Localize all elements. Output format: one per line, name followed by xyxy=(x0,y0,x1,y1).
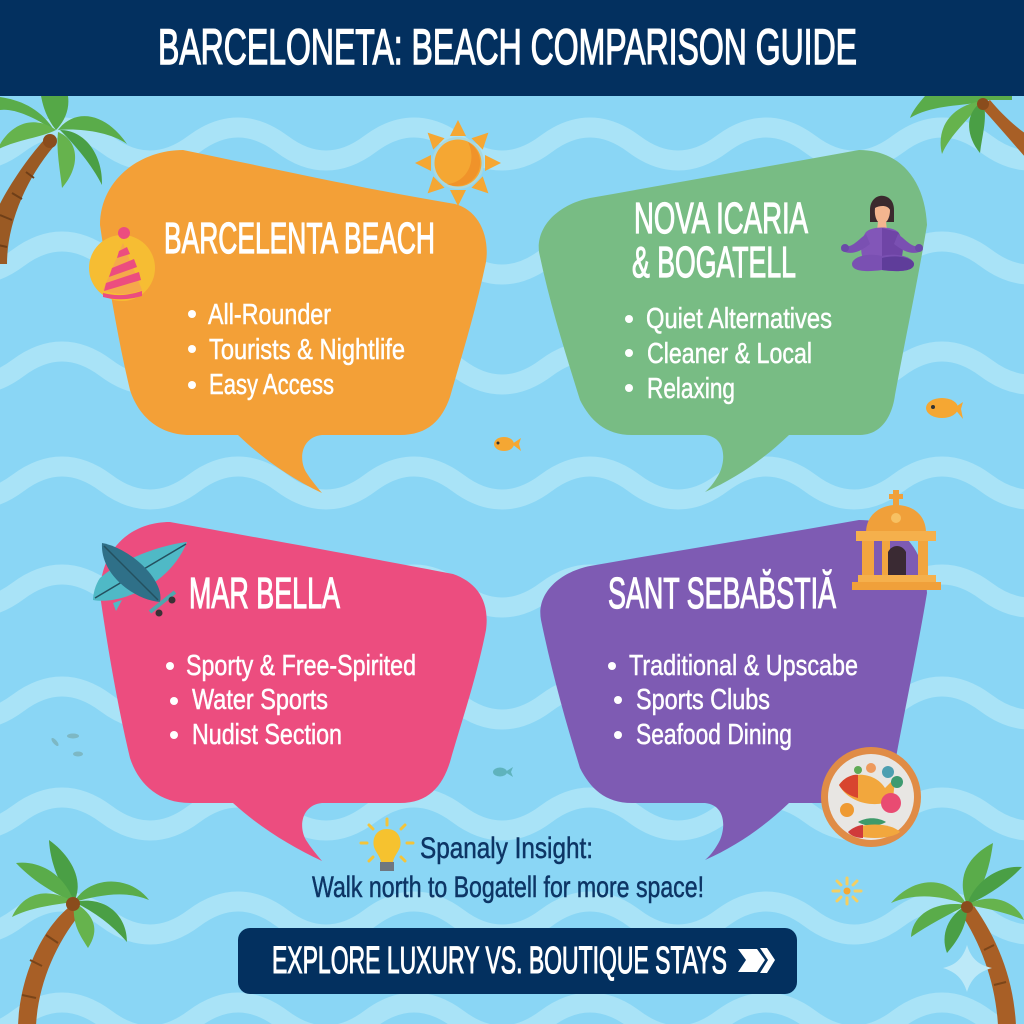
call to action button: EXPLORE LUXURY VS. BOUTIQUE STAYS xyxy=(272,940,727,982)
icon: palm tree bottom left xyxy=(12,840,149,1024)
icon: surfboards and skateboard xyxy=(93,542,187,616)
icon: palm tree top right xyxy=(910,96,1024,158)
panel: Mar Bella xyxy=(93,522,487,861)
icon: palm tree bottom right xyxy=(891,843,1024,1024)
icon: small sun sparkle xyxy=(833,878,861,904)
bullet list: Cleaner & Local xyxy=(647,338,812,370)
bullet list: Seafood Dining xyxy=(636,719,792,751)
bullet list: Traditional & Upscabe xyxy=(629,650,858,682)
bullet list: Relaxing xyxy=(647,373,735,405)
bullet list: Nudist Section xyxy=(192,719,342,751)
icon: double arrow xyxy=(738,948,775,973)
icon: palm tree top left xyxy=(0,96,127,264)
bullet list: Easy Access xyxy=(209,369,334,401)
heading: NOVA ICARIA xyxy=(634,194,808,243)
icon: party hat xyxy=(89,227,155,301)
header banner xyxy=(0,0,1024,96)
icon: white sparkle xyxy=(943,945,992,992)
panel: Nova Icaria & Bogatell: & BOGATELL xyxy=(632,238,796,287)
bullet list: All-Rounder xyxy=(208,299,331,331)
icon: orange fish right xyxy=(926,398,963,419)
icon: orange fish small xyxy=(494,437,521,451)
icon: domed temple xyxy=(852,490,941,590)
bullet list: Water Sports xyxy=(192,684,328,716)
insight title: Spanaly Insight: xyxy=(420,832,593,865)
icon: tiny school of fish xyxy=(50,734,83,756)
bullet list: Sports Clubs xyxy=(636,684,770,716)
insight callout xyxy=(312,819,704,904)
bullet list: Quiet Alternatives xyxy=(646,303,832,335)
bullet list: Sporty & Free-Spirited xyxy=(186,650,416,682)
bullet list xyxy=(166,650,416,751)
bullet list xyxy=(188,299,405,401)
icon: seafood plate xyxy=(821,747,921,847)
bullet list xyxy=(625,303,832,405)
bullet list: Tourists & Nightlife xyxy=(209,334,405,366)
heading: SANT SEBAB̆STIĂ xyxy=(608,569,836,618)
panel: Barcelenta Beach xyxy=(89,150,487,493)
insight text: Walk north to Bogatell for more space! xyxy=(312,871,704,904)
icon: sun xyxy=(415,120,501,206)
heading: MAR BELLA xyxy=(189,569,340,618)
icon: muted teal fish xyxy=(493,767,513,777)
panel: Nova Icaria & Bogatell xyxy=(539,150,927,492)
icon: meditating person xyxy=(841,196,923,271)
icon: light bulb xyxy=(361,819,413,871)
panel: Sant Sebastia xyxy=(540,490,941,860)
bullet list xyxy=(608,650,858,751)
call to action button xyxy=(238,928,797,994)
heading: BARCELENTA BEACH xyxy=(164,214,435,263)
